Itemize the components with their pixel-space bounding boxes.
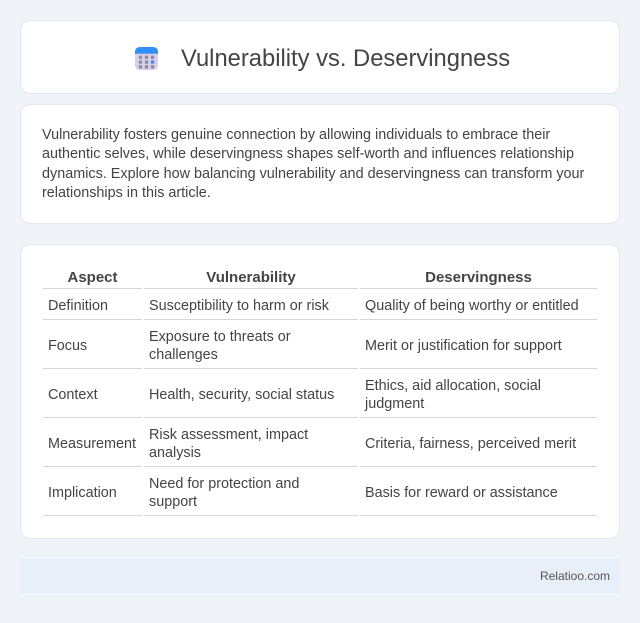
- table: Health, security, social status: [149, 387, 334, 403]
- row: Context: Context: [48, 387, 98, 403]
- intro card: [20, 104, 620, 224]
- title card: [20, 20, 620, 94]
- footer bar: [20, 559, 620, 593]
- table: analysis: [149, 445, 201, 461]
- icon: calendar: [134, 47, 158, 70]
- table: judgment: [365, 396, 424, 412]
- intro text: authentic selves, while deservingness shapes self-worth and influences relationship: [42, 146, 574, 162]
- table: Exposure to threats or: [149, 329, 291, 345]
- table: Quality of being worthy or entitled: [365, 298, 579, 314]
- table: Susceptibility to harm or risk: [149, 298, 329, 314]
- table: Merit or justification for support: [365, 338, 562, 354]
- table: challenges: [149, 347, 218, 363]
- title: Vulnerability vs. Deservingness: [181, 45, 510, 72]
- intro text: relationships in this article.: [42, 185, 211, 201]
- header: Aspect: Aspect: [67, 269, 118, 286]
- table: Risk assessment, impact: [149, 427, 308, 443]
- intro text: [42, 126, 584, 201]
- table: Ethics, aid allocation, social: [365, 378, 541, 394]
- header: Deservingness: Deservingness: [425, 269, 532, 286]
- row: Focus: Focus: [48, 338, 87, 354]
- row: Measurement: Measurement: [48, 436, 136, 452]
- row: Implication: Implication: [48, 485, 117, 501]
- table: Need for protection and: [149, 476, 299, 492]
- table: Basis for reward or assistance: [365, 485, 558, 501]
- header: Vulnerability: Vulnerability: [206, 269, 296, 286]
- intro text: Vulnerability fosters genuine connection by allowing individuals to embrace their: [42, 126, 550, 142]
- table: Criteria, fairness, perceived merit: [365, 436, 576, 452]
- intro text: dynamics. Explore how balancing vulnerability and deservingness can transform your: [42, 166, 584, 182]
- table: [43, 269, 597, 516]
- table: support: [149, 494, 197, 510]
- row: Definition: Definition: [48, 298, 108, 314]
- table card: [20, 244, 620, 539]
- footer text: Relatioo.com: [540, 569, 610, 583]
